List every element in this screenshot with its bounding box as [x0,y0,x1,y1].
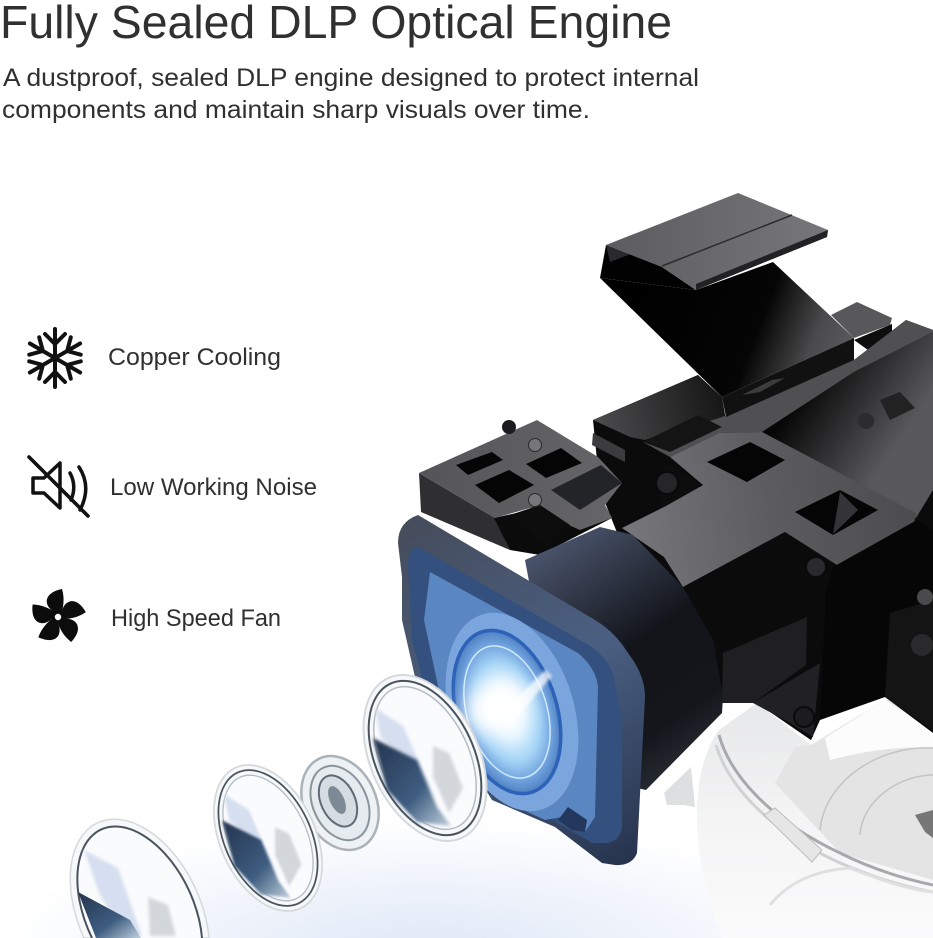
shelf [593,375,726,440]
lens: middle [192,748,344,928]
band [643,320,933,457]
main surface [622,432,916,587]
label: high speed fan: High Speed Fan [111,605,281,632]
transparent base housing [664,700,933,938]
lens: large front [339,655,511,861]
subtitle [2,64,699,124]
screws [656,472,678,494]
lens: rear [70,819,209,938]
icon: muted speaker [29,457,88,516]
label: copper cooling: Copper Cooling [108,344,281,371]
feature: low working noise [29,457,317,516]
right back plate [762,332,933,518]
lower mount [683,532,823,740]
label: low working noise: Low Working Noise [110,474,317,501]
chassis cutouts [707,442,785,482]
icon: snowflake [25,329,85,387]
feature: high speed fan [28,589,281,646]
subtitle: components and maintain sharp visuals over time. [2,96,590,124]
lens barrel [525,527,723,790]
optical engine body [398,193,933,865]
subtitle: A dustproof, sealed DLP engine designed to protect internal [3,64,699,92]
chassis base [593,320,933,740]
right back piece [831,302,892,338]
floor glow [0,760,933,938]
left bracket block [419,420,622,555]
feature: copper cooling [25,329,281,387]
facet and screw [655,463,703,507]
icon: fan [28,589,86,646]
front bezel [398,515,645,865]
top flap [600,193,854,417]
lens: small ring [287,743,393,863]
